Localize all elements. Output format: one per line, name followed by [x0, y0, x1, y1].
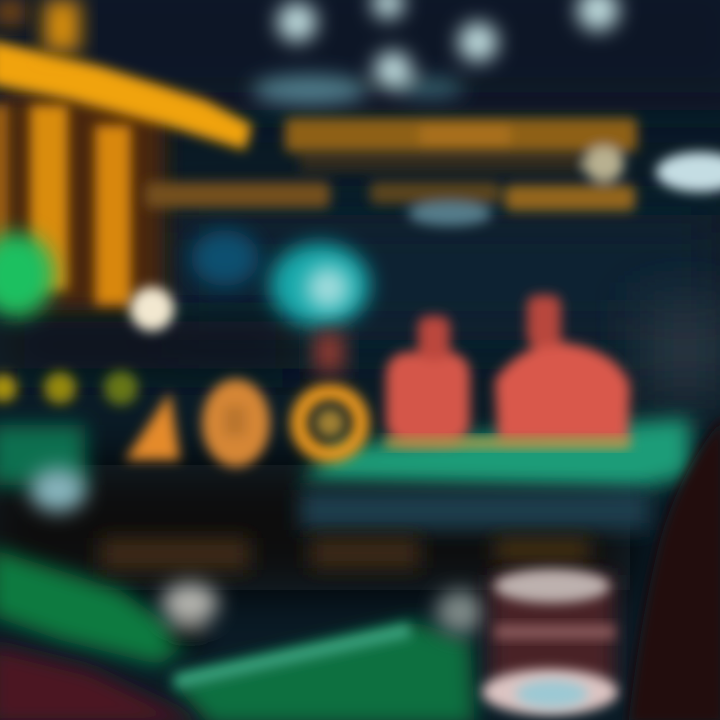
left green band — [0, 425, 85, 485]
orange ring icon — [299, 332, 361, 454]
orange triangle icon — [125, 392, 180, 460]
red bag icon small — [386, 316, 470, 444]
dark teal band — [300, 490, 650, 530]
ceiling lights — [252, 0, 619, 105]
white game pieces — [162, 583, 484, 644]
temple finial — [44, 0, 80, 52]
blue glow — [191, 230, 259, 286]
temple roof beam — [0, 40, 252, 150]
white blob left — [30, 468, 86, 512]
green table band — [300, 418, 690, 490]
bottom left red rail — [0, 645, 205, 720]
red bag icon large — [495, 295, 630, 442]
orange letter icon — [202, 379, 270, 467]
yellow dots row — [0, 371, 138, 405]
golden temple building — [0, 0, 252, 310]
bright cloud right — [656, 152, 720, 192]
orange glow under bags — [385, 438, 630, 448]
blurred brown captions — [100, 538, 590, 570]
dark red foreground figure — [628, 415, 720, 720]
temple columns — [0, 105, 131, 305]
white lamp — [130, 287, 174, 331]
heading: blurred gold text — [145, 118, 637, 226]
poker chip stack — [482, 569, 618, 715]
building shadow — [0, 95, 165, 310]
felt highlight line — [175, 630, 410, 682]
teal glow — [270, 243, 370, 327]
green glow blob — [0, 233, 54, 317]
bottom green felt — [0, 548, 475, 720]
